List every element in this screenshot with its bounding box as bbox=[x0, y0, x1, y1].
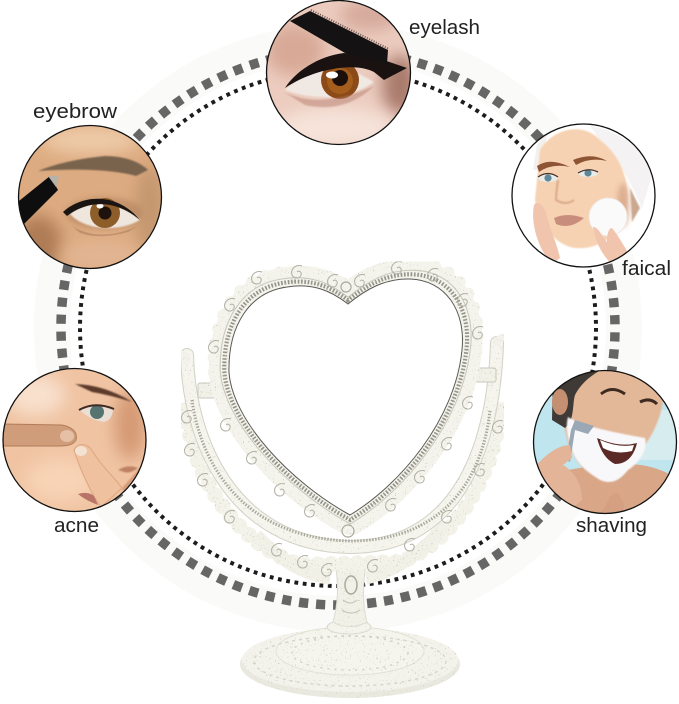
photo: eyebrow bbox=[19, 126, 161, 268]
stand arm bbox=[181, 337, 504, 578]
mirror metalwork bbox=[181, 262, 504, 698]
heart frame bbox=[209, 262, 483, 537]
heart mirror on stand bbox=[181, 262, 504, 698]
photo: acne bbox=[2, 367, 148, 513]
label: eyelash: eyelash bbox=[409, 17, 480, 39]
label: acne: acne bbox=[54, 515, 99, 537]
circle outline: shaving bbox=[534, 370, 676, 514]
decorative ring bbox=[52, 42, 624, 614]
photo: faical bbox=[526, 126, 652, 266]
dotted ring bbox=[80, 70, 596, 586]
mirror base bbox=[240, 620, 460, 698]
pivot right bbox=[470, 368, 496, 382]
label: eyebrow: eyebrow bbox=[33, 101, 118, 123]
mirror stem bbox=[333, 562, 367, 626]
square dashed ring bbox=[61, 51, 615, 605]
circle outline: eyebrow bbox=[18, 126, 162, 268]
pivot left bbox=[198, 383, 224, 398]
arm band bbox=[187, 343, 497, 547]
circle outline: eyelash bbox=[266, 0, 410, 144]
photo: eyelash bbox=[265, 0, 418, 148]
arm filigree bbox=[186, 400, 502, 565]
circle outline: acne bbox=[3, 368, 146, 512]
label: shaving: shaving bbox=[576, 515, 647, 537]
label: faical: faical bbox=[622, 258, 671, 280]
photo: shaving bbox=[532, 368, 679, 516]
soft band bbox=[52, 42, 624, 614]
circle outline: faical bbox=[512, 124, 655, 267]
mirror glass bbox=[229, 279, 462, 515]
